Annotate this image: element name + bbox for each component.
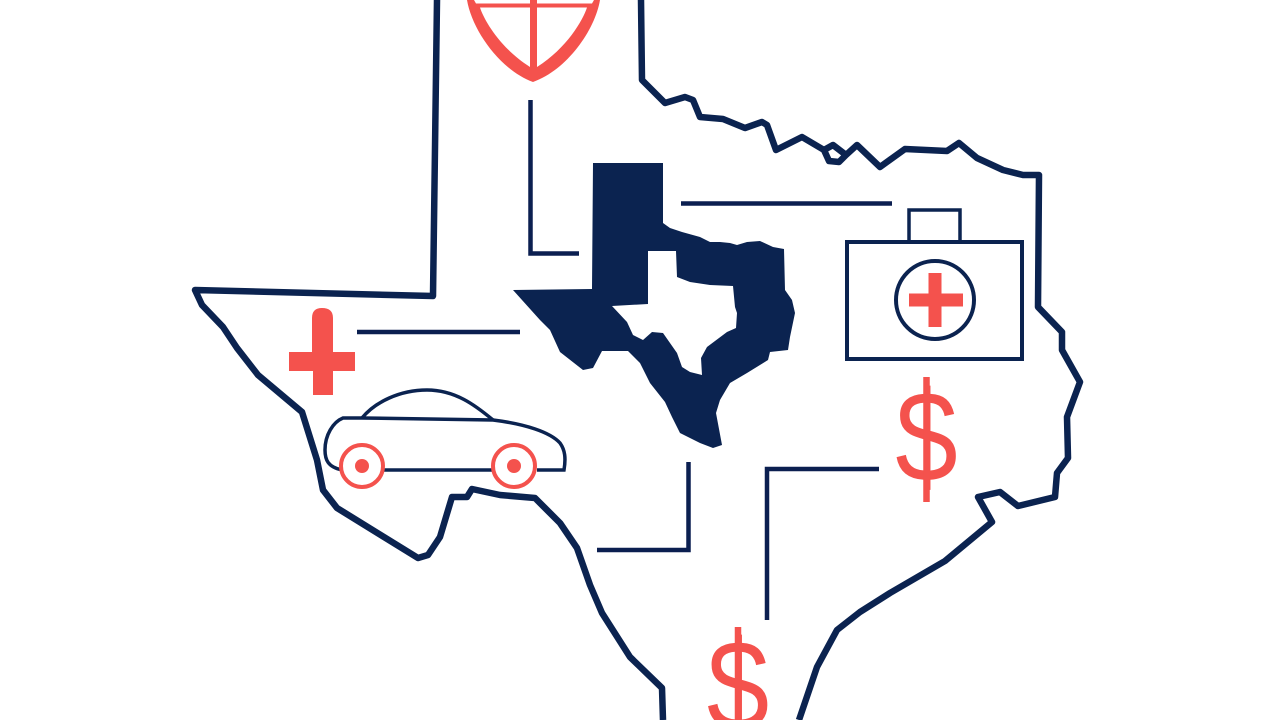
icon: shield bbox=[467, 0, 600, 82]
connector: cross to center map bbox=[357, 330, 520, 334]
icon: dollar sign right: $ bbox=[895, 365, 958, 509]
connector: center map to lower left bbox=[597, 462, 688, 550]
connector: center map to first aid kit bbox=[681, 201, 892, 206]
icon: medical cross bbox=[289, 308, 355, 395]
connector: shield to center map bbox=[530, 100, 579, 254]
icon: first aid kit bbox=[847, 210, 1022, 359]
Texas outline bbox=[195, 0, 1080, 720]
center Texas star cutout bbox=[612, 251, 737, 375]
center Texas silhouette bbox=[513, 163, 795, 448]
icon: car bbox=[325, 390, 565, 487]
connector: dollar signs bbox=[767, 469, 879, 620]
